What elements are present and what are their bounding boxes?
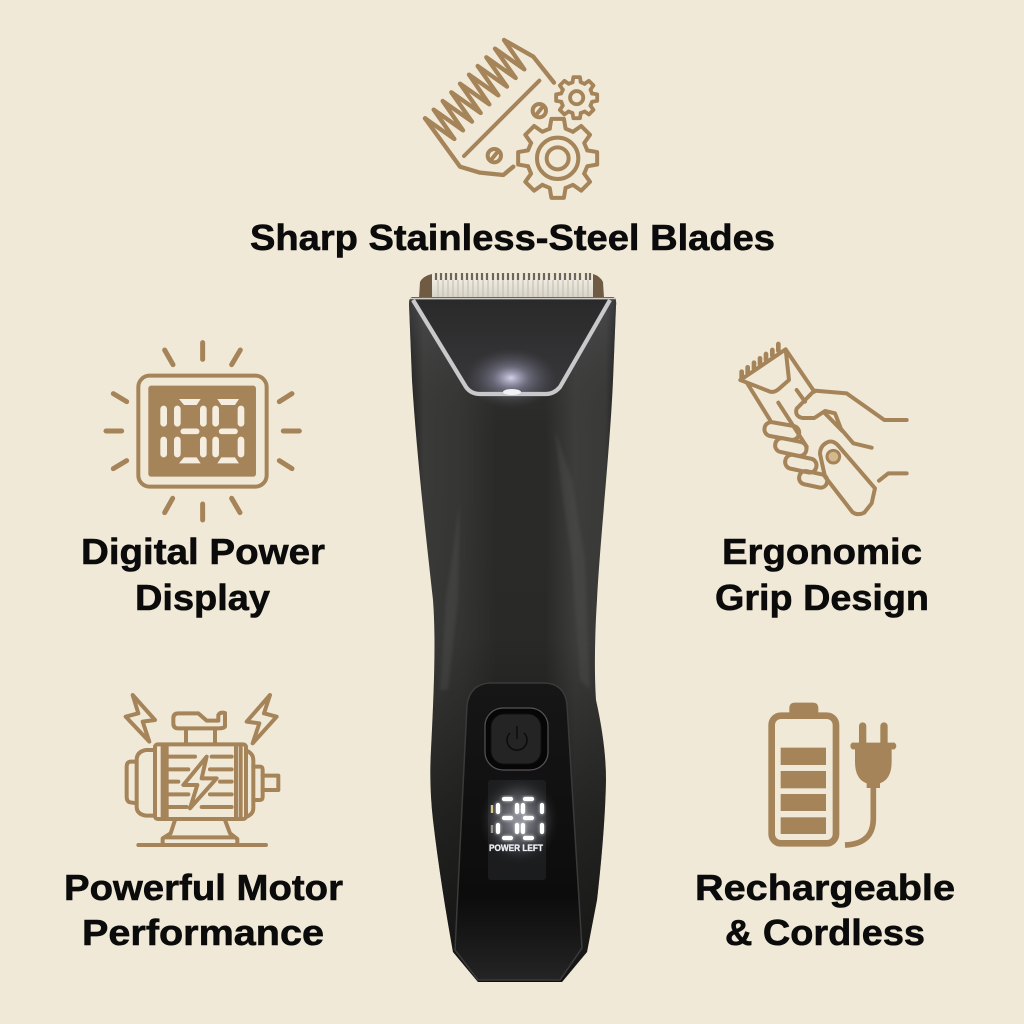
silver chevron trim bbox=[413, 300, 610, 394]
product: trimmer bbox=[409, 273, 616, 982]
heading: rechargeable: Rechargeable bbox=[695, 867, 955, 908]
spot light bbox=[465, 348, 557, 408]
icon: clipper blade and gears bbox=[425, 40, 597, 198]
icon: digital display bbox=[106, 343, 299, 520]
LED digits bbox=[492, 799, 542, 838]
icon: electric motor bbox=[126, 695, 278, 845]
icon: battery and plug bbox=[772, 703, 896, 845]
heading: digital power display: Display bbox=[135, 577, 271, 618]
body highlights bbox=[440, 430, 590, 690]
display window bbox=[488, 780, 546, 880]
heading: rechargeable bbox=[695, 867, 955, 953]
heading: digital power display: Digital Power bbox=[81, 531, 325, 572]
heading: powerful motor: Performance bbox=[82, 912, 324, 953]
heading: ergonomic grip: Grip Design bbox=[715, 577, 929, 618]
heading: sharp blades: Sharp Stainless-Steel Blades bbox=[250, 217, 775, 258]
chevron panel bbox=[414, 300, 610, 394]
heading: rechargeable: & Cordless bbox=[725, 912, 925, 953]
heading: digital power display bbox=[81, 531, 325, 618]
display caption: POWER LEFT bbox=[489, 843, 543, 854]
blade head bbox=[419, 273, 604, 299]
control panel bbox=[455, 683, 582, 980]
icon: hand gripping clipper bbox=[740, 344, 907, 514]
heading: powerful motor: Powerful Motor bbox=[64, 867, 343, 908]
trimmer body bbox=[409, 297, 616, 982]
heading: powerful motor bbox=[64, 867, 343, 953]
heading: ergonomic grip bbox=[715, 531, 929, 618]
heading: ergonomic grip: Ergonomic bbox=[722, 531, 922, 572]
power button bbox=[485, 708, 548, 770]
